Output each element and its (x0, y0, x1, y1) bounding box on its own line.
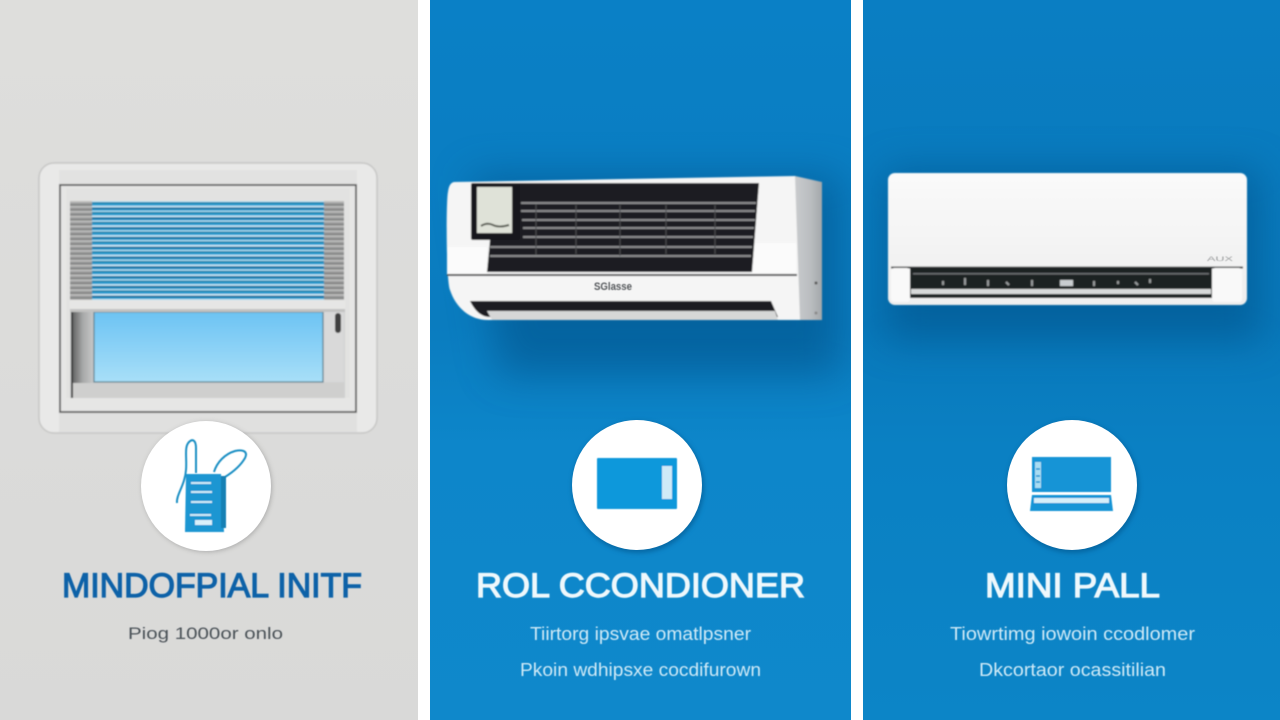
heading: window unit: MINDOFPIAL INITF (62, 567, 362, 605)
shadow (885, 170, 1260, 340)
unit body (888, 173, 1247, 305)
illustration: mini split unit (885, 170, 1260, 340)
brand label: SGlasse (594, 281, 632, 293)
icon: portable unit in circle (141, 421, 272, 552)
heading: portable conditioner: ROL CCONDIONER (476, 567, 805, 605)
panel: portable conditioner background (430, 0, 851, 720)
icon: laptop-shaped unit in circle (1007, 420, 1139, 553)
text: mini split description line 2: Dkcortaor ocassitilian (979, 660, 1166, 680)
brand label: AUX (1207, 257, 1233, 263)
illustration: window with blinds (39, 163, 377, 433)
panel: mini split background (863, 0, 1280, 720)
illustration: wall air conditioner (447, 176, 840, 375)
text: window unit description: Piog 1000or onlo (128, 624, 283, 643)
shadow (470, 176, 840, 375)
heading: mini split: MINI PALL (985, 567, 1160, 605)
icon: rectangle panel in circle (572, 420, 704, 553)
text: portable conditioner description line 2: Pkoin wdhipsxe cocdifurown (520, 660, 761, 680)
panel: window unit background (0, 0, 418, 720)
unit body (447, 176, 822, 320)
text: mini split description line 1: Tiowrtimg iowoin ccodlomer (950, 624, 1195, 644)
text: portable conditioner description line 1: Tiirtorg ipsvae omatlpsner (530, 624, 751, 644)
